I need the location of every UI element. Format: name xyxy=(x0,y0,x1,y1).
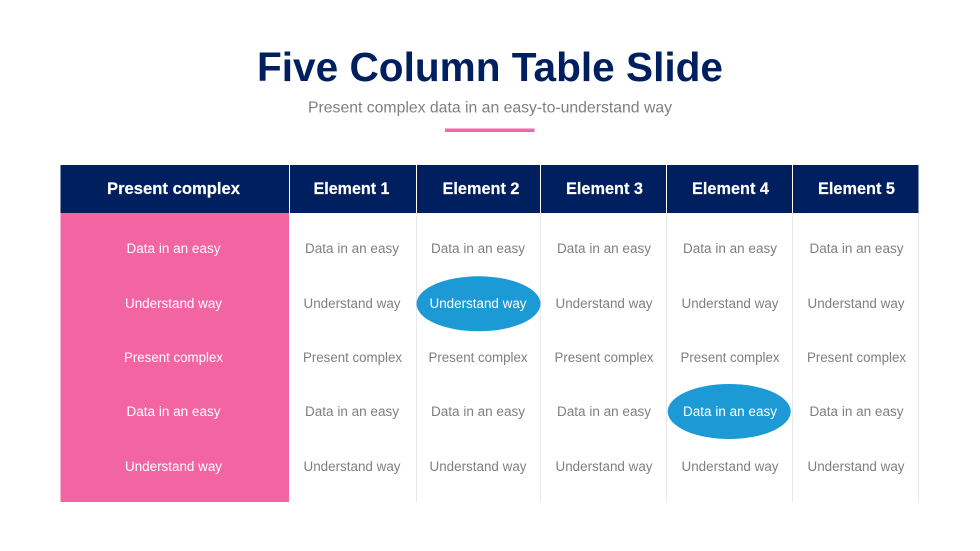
pink label column: Present complex xyxy=(124,350,223,365)
column: Element 3: Data in an easy xyxy=(557,404,651,419)
highlight: Understand way: Understand way xyxy=(430,296,527,311)
column: Element 3: Understand way xyxy=(556,459,653,474)
table column dividers xyxy=(416,213,918,502)
highlight: Data in an easy xyxy=(668,384,791,439)
column: Element 1: Data in an easy xyxy=(305,241,399,256)
header row: Element 4 xyxy=(692,180,770,198)
table xyxy=(60,165,918,502)
header row: Element 1 xyxy=(314,180,390,198)
header row: Element 2 xyxy=(442,180,520,198)
column: Element 4 xyxy=(668,241,791,474)
pink label column: Understand way xyxy=(125,296,222,311)
column: Element 3: Data in an easy xyxy=(557,241,651,256)
pink label column: Data in an easy xyxy=(126,241,221,256)
column: Element 1: Present complex xyxy=(303,350,402,365)
column: Element 2: Present complex xyxy=(428,350,528,365)
column: Element 5: Data in an easy xyxy=(810,404,904,419)
subtitle: Present complex data in an easy-to-understand way xyxy=(308,100,672,116)
column: Element 3 xyxy=(554,241,654,474)
column: Element 1 xyxy=(303,241,402,474)
column: Element 2 xyxy=(416,241,540,474)
pink label column: Understand way xyxy=(125,459,222,474)
column: Element 5: Understand way xyxy=(808,296,905,311)
column: Element 5: Data in an easy xyxy=(810,241,904,256)
column: Element 2: Understand way xyxy=(430,459,527,474)
header row xyxy=(60,165,918,213)
column: Element 4: Understand way xyxy=(682,296,779,311)
header row: Element 3 xyxy=(566,180,643,198)
column: Element 4: Data in an easy xyxy=(683,241,777,256)
column: Element 2: Data in an easy xyxy=(431,404,525,419)
header row: Element 5 xyxy=(818,180,895,198)
pink label column xyxy=(60,213,289,502)
accent underline xyxy=(445,128,534,132)
column: Element 5: Understand way xyxy=(808,459,905,474)
column: Element 1: Data in an easy xyxy=(305,404,399,419)
column: Element 3: Present complex xyxy=(554,350,654,365)
column: Element 5: Present complex xyxy=(807,350,906,365)
column: Element 5 xyxy=(807,241,906,474)
column: Element 4: Understand way xyxy=(682,459,779,474)
column: Element 2: Data in an easy xyxy=(431,241,525,256)
highlight: Data in an easy: Data in an easy xyxy=(683,404,777,419)
column: Element 4: Present complex xyxy=(680,350,780,365)
column: Element 1: Understand way xyxy=(304,459,401,474)
pink label column: Data in an easy xyxy=(126,404,221,419)
title: Five Column Table Slide xyxy=(257,44,723,90)
column: Element 1: Understand way xyxy=(304,296,401,311)
header row: Present complex xyxy=(107,180,241,198)
highlight: Understand way xyxy=(416,276,540,331)
column: Element 3: Understand way xyxy=(556,296,653,311)
